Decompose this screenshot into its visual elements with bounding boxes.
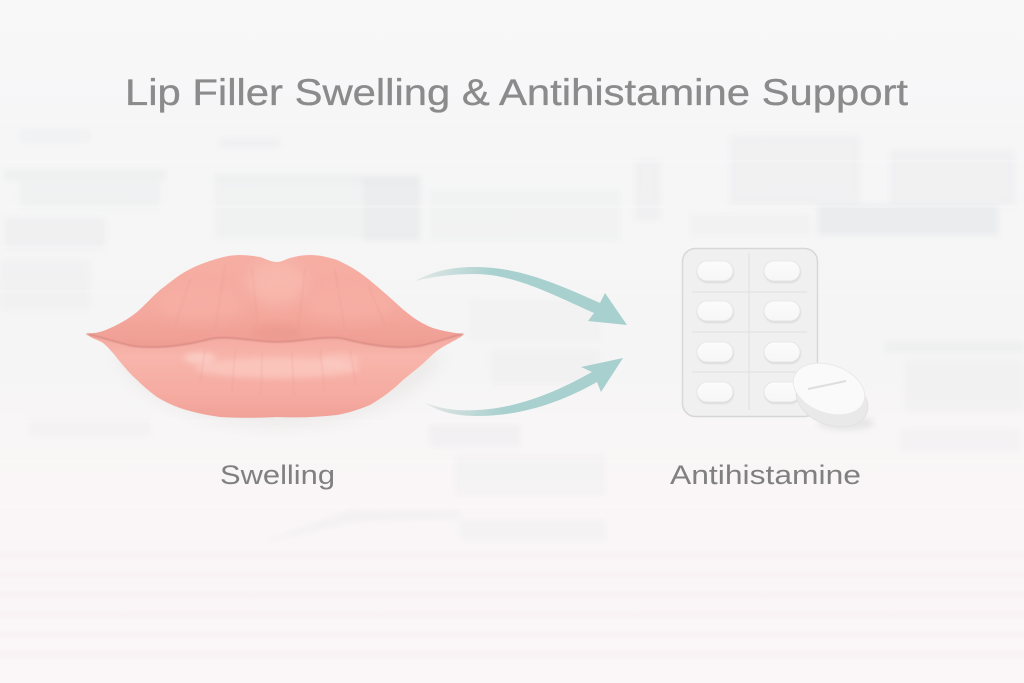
label: Swelling: Swelling [220,460,335,490]
icon: swollen lips [85,250,465,426]
icon: blister pack with tablet [682,248,875,436]
label: Antihistamine: Antihistamine [670,460,861,490]
mouth line [87,334,463,347]
title: Lip Filler Swelling & Antihistamine Support [125,72,909,113]
arrow: lips toward antihistamine, upper [415,267,627,325]
lower lip [85,330,465,420]
arrow: lips toward antihistamine, lower [425,358,623,416]
upper lip [85,250,465,350]
blister card [682,248,818,416]
loose tablet [786,354,875,436]
